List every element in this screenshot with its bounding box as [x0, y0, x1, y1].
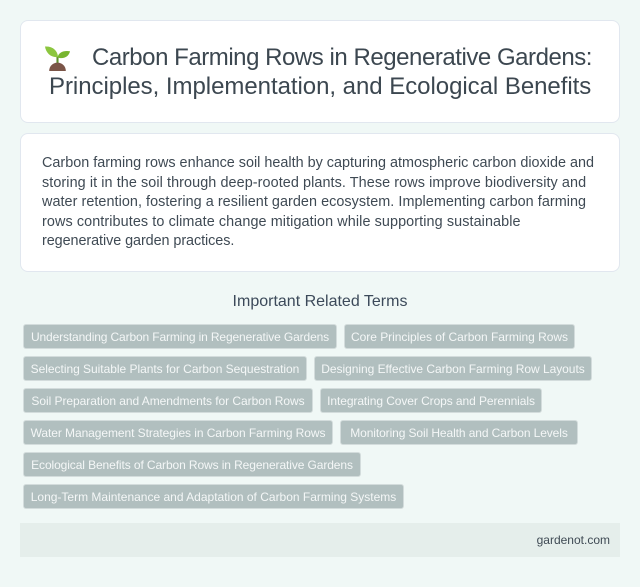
tag: Ecological Benefits of Carbon Rows in Regenerative Gardens — [31, 458, 353, 472]
tag — [344, 324, 575, 349]
tag — [23, 324, 337, 349]
tag — [23, 420, 333, 445]
summary text: Carbon farming rows enhance soil health by capturing atmospheric carbon dioxide and — [42, 155, 594, 171]
tag — [23, 452, 361, 477]
tag — [23, 356, 307, 381]
tag: Designing Effective Carbon Farming Row Layouts — [321, 362, 585, 376]
summary text: storing it in the soil through deep-rooted plants. These rows improve biodiversity and — [42, 174, 586, 190]
summary text: regenerative garden practices. — [42, 233, 234, 249]
tag — [320, 388, 542, 413]
tag: Selecting Suitable Plants for Carbon Sequestration — [31, 362, 299, 376]
summary text: rows contributes to climate change mitigation while supporting sustainable — [42, 214, 521, 230]
tag — [340, 420, 578, 445]
summary text: water retention, fostering a resilient garden ecosystem. Implementing carbon farming — [42, 194, 586, 210]
panel: title card — [20, 20, 620, 123]
icon: seedling — [45, 46, 70, 71]
footer bar — [20, 523, 620, 557]
tag: Monitoring Soil Health and Carbon Levels — [350, 426, 568, 440]
tag: Long-Term Maintenance and Adaptation of Carbon Farming Systems — [31, 490, 396, 504]
heading: related terms: Important Related Terms — [233, 293, 407, 310]
title: Carbon Farming Rows in Regenerative Gardens: — [92, 44, 592, 71]
panel: summary — [20, 133, 620, 272]
tag: Integrating Cover Crops and Perennials — [327, 394, 535, 408]
footer source: gardenot.com — [537, 533, 610, 547]
title — [49, 44, 592, 100]
tag: Core Principles of Carbon Farming Rows — [351, 330, 568, 344]
tag: Water Management Strategies in Carbon Farming Rows — [31, 426, 325, 440]
tag — [23, 484, 404, 509]
title: Principles, Implementation, and Ecological Benefits — [49, 73, 591, 100]
summary text — [42, 155, 594, 249]
tag — [314, 356, 592, 381]
tag: Soil Preparation and Amendments for Carbon Rows — [31, 394, 305, 408]
tag — [23, 388, 313, 413]
tag: Understanding Carbon Farming in Regenerative Gardens — [31, 330, 329, 344]
related terms tags — [23, 324, 592, 509]
